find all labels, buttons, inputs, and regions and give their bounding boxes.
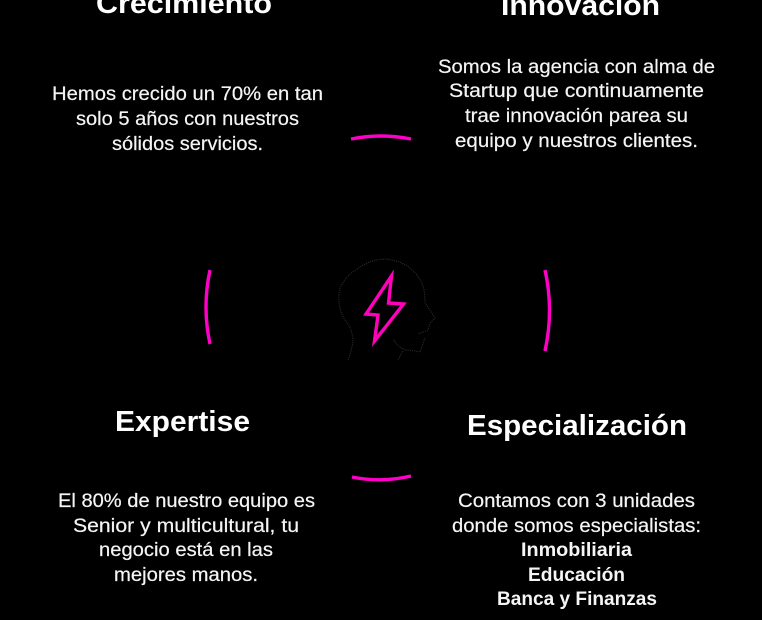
text block: Expertise description: Senior y multicultural, tu [73,515,299,537]
icon: lightning bolt [366,276,404,341]
panel: Especialización [452,410,701,610]
text block: Innovación description [438,56,715,152]
arc: left [206,270,210,344]
heading: Especialización: Especialización [467,410,687,442]
text block: Innovación description: equipo y nuestros clientes. [455,130,698,152]
text block: Crecimiento description: solo 5 años con nuestros [76,108,299,130]
text block: Especialización description: donde somos especialistas: [452,515,701,537]
panel: Expertise [58,406,315,586]
text block: Innovación description: Somos la agencia con alma de [438,56,715,78]
text block: Especialización description: Educación [528,565,625,586]
text block: Especialización description: Inmobiliaria [521,540,632,561]
text block: Crecimiento description: sólidos servicios. [112,133,263,155]
text block: Expertise description: mejores manos. [114,564,258,586]
text block: Expertise description [58,490,315,586]
arc: right [545,270,550,351]
head outline [339,259,435,360]
text block: Innovación description: Startup que continuamente [449,80,704,102]
text block: Especialización description: Contamos con 3 unidades [458,490,695,512]
text block: Especialización description [452,490,701,610]
text block: Crecimiento description: Hemos crecido un 70% en tan [52,83,323,105]
text block: Crecimiento description [52,83,323,155]
arc: top [351,136,411,139]
panel: Innovación [438,0,715,152]
text block: Innovación description: trae innovación parea su [465,105,688,127]
heading: Expertise: Expertise [115,406,250,438]
arc: bottom [352,476,411,480]
icon: head with lightning bolt [339,259,435,360]
text block: Especialización description: Banca y Finanzas [497,589,657,610]
panel: Crecimiento [52,0,323,155]
text block: Expertise description: negocio está en las [99,539,273,561]
text block: Expertise description: El 80% de nuestro equipo es [58,490,315,512]
